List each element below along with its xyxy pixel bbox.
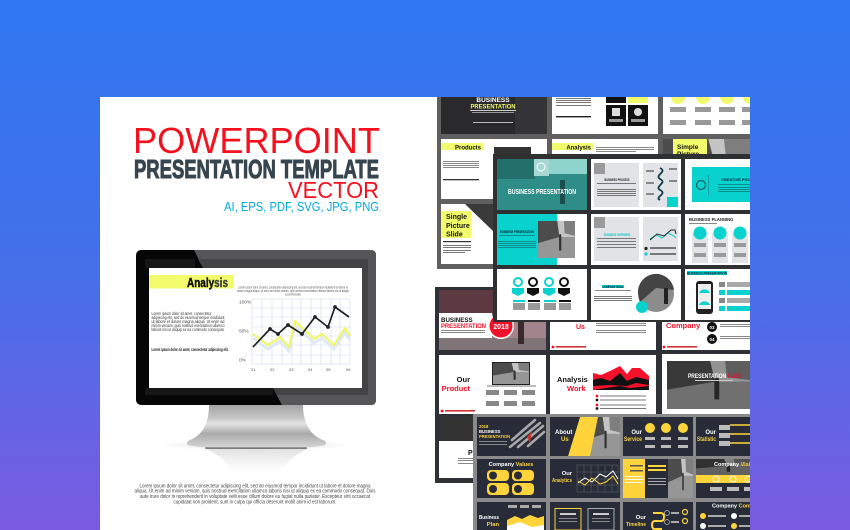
screen left paragraph: adipiscing elit, sed do eiusmod tempor incididunt — [152, 315, 225, 320]
slide: 2018 business presentation: PRESENTATION — [479, 434, 510, 439]
panel: red slide group — [435, 287, 750, 483]
line chart: 0% — [239, 358, 247, 364]
slide: Our Statistic — [696, 417, 750, 456]
slide: Company numbers: Company — [666, 321, 701, 330]
slide: Product partial: Pr — [468, 450, 476, 457]
slide: Our Statistic: Statistic — [697, 437, 717, 443]
line chart: 04 — [308, 367, 313, 372]
slide: Presentation Slide photo: PRESENTATION SLIDE — [688, 373, 742, 380]
slide: About Us: About — [555, 430, 572, 436]
slide: Simple Picture: Picture — [677, 151, 699, 158]
slide: Our Analytics: Our — [562, 471, 573, 477]
slide: Analysis: Analysis — [566, 146, 592, 152]
slide: business overview chart — [591, 214, 681, 265]
screen left paragraph: ut labore et dolore magna aliqua. Ut enim ad — [152, 319, 225, 324]
winding process line — [658, 168, 663, 200]
slide: Our Timeline: Our — [636, 515, 647, 521]
slide: Company numbers — [662, 322, 750, 350]
slide: business overview chart: BUSINESS OVERVIEW — [604, 233, 630, 237]
slide: Company Vision — [696, 459, 750, 498]
slide: Business Plan: Business — [479, 515, 499, 521]
slide: Our Analytics — [550, 459, 620, 498]
screen chart caption: dolore magna aliqua. Ut enim ad minim veniam, quis nostrud exercitation ullamco laboris nisi ut aliquip — [237, 289, 349, 293]
slide: Analysis Work: Work — [567, 384, 586, 393]
slide: Single Picture Slide — [441, 204, 493, 264]
slide: Company Values: Company Values — [489, 462, 533, 468]
title block — [133, 120, 380, 214]
slide: Single Picture Slide: Single — [446, 214, 467, 221]
screen bold line: Lorem ipsum dolor sit amet, consectetur adipiscing elit. — [152, 347, 228, 352]
line chart: 50% — [239, 328, 249, 334]
slide: Our Product — [439, 355, 546, 414]
slide: 2018 business presentation: BUSINESS — [479, 429, 501, 434]
slide: Company Vision: Company Vision — [714, 462, 758, 468]
slide: Company numbers: 03 — [709, 325, 715, 330]
slide: business presentation 2018 — [439, 290, 546, 350]
slide: Company Values — [477, 459, 546, 498]
slide: business presentation 2018: 2018 — [493, 324, 509, 331]
slide: business planning — [685, 214, 750, 265]
slide: About Us red: Us — [576, 324, 585, 331]
slide: Our Timeline — [623, 502, 693, 530]
slide: business presentation dark: PRESENTATION — [470, 104, 516, 110]
title: VECTOR: VECTOR — [288, 177, 379, 203]
slide: About Us — [550, 417, 620, 456]
line chart — [239, 299, 351, 372]
monitor stand — [145, 405, 365, 471]
line chart: 06 — [346, 367, 351, 372]
slide: About Us red — [550, 322, 656, 350]
line chart: 02 — [270, 367, 275, 372]
slide: Our Service: Service — [624, 437, 643, 443]
slide: business presentation 2018: BUSINESS — [441, 317, 473, 324]
slide: four percent icons — [497, 269, 587, 320]
slide: Business Plan: Plan — [487, 522, 499, 528]
slide: Products — [441, 139, 547, 199]
slide: Our Service — [623, 417, 693, 456]
footer paragraph: aliqua. Ut enim ad minim veniam, quis nostrud exercitation ullamco laboris nisi ut aliquip ex ea commodo consequat. Duis — [134, 488, 376, 494]
monitor bezel — [136, 250, 376, 405]
slide: company goal — [591, 269, 681, 320]
slide: Our Product: Our — [457, 375, 470, 384]
panel: yellow and navy slide group — [473, 414, 759, 530]
slide: Simple Picture — [663, 139, 750, 154]
slide: phone diagram: BUSINESS PRESENTATION — [687, 272, 727, 276]
screen chart caption: commodo — [285, 292, 301, 296]
slide: cyan business presentation — [497, 214, 587, 265]
slide: Our Timeline: Timeline — [626, 522, 647, 528]
screen left paragraph — [152, 311, 225, 332]
slide: framed boxes — [550, 502, 620, 530]
title: PRESENTATION TEMPLATE: PRESENTATION TEMPLATE — [134, 154, 379, 184]
slide: business presentation dark — [441, 97, 547, 134]
slide: Our Product: Product — [442, 384, 470, 393]
slide: Business Plan — [477, 502, 546, 530]
footer paragraph: aute irure dolor in reprehenderit in voluptate velit esse cillum dolore eu fugiat nulla pariatur. Excepteur sint occaecat — [140, 494, 371, 500]
slide: teal cover: BUSINESS PRESENTATION — [508, 189, 576, 196]
slide: business process: BUSINESS PROCESS — [604, 178, 630, 182]
slide: business planning: BUSINESS PLANNING — [689, 217, 733, 222]
line chart: 05 — [326, 367, 331, 372]
slide: Simple Picture: Simple — [677, 144, 699, 151]
area chart — [593, 366, 649, 390]
slide: Product partial — [439, 441, 473, 478]
slide: business presentation dark: BUSINESS — [476, 97, 510, 104]
slide: teal cover — [497, 159, 587, 210]
file formats: AI, EPS, PDF, SVG, JPG, PNG — [224, 200, 379, 214]
slide collage — [435, 90, 762, 530]
line chart: 03 — [289, 367, 294, 372]
screen heading: Analysis — [149, 275, 234, 290]
slide: cyan business presentation: BUSINESS PRESENTATION — [500, 230, 534, 234]
line chart: 01 — [251, 367, 256, 372]
slide: Company Contact — [696, 502, 759, 530]
slide: icon tiles — [552, 97, 658, 134]
slide: company goal: COMPANY GOAL — [602, 285, 624, 289]
slide: business process — [591, 159, 681, 210]
slide: Company numbers: 04 — [709, 337, 715, 342]
panel: teal slide group — [493, 154, 762, 322]
slide: yellow split — [623, 459, 693, 498]
slide: About Us: Us — [561, 437, 569, 443]
slide: 2018 business presentation — [477, 417, 546, 456]
slide: Analysis Work — [550, 355, 656, 414]
panel: yellow slide group — [437, 90, 757, 269]
slide: Products: Products — [455, 146, 482, 152]
slide: 2018 business presentation: 2018 — [479, 424, 489, 429]
line chart: 100% — [239, 300, 252, 306]
screen chart caption — [237, 286, 349, 296]
monitor screen — [149, 268, 362, 388]
screen chart caption: Lorem ipsum dolor sit amet, consectetur adipiscing elit, sed do eiusmod tempor incididunt ut labore et — [238, 286, 348, 290]
screen left paragraph: laboris nisi ut aliquip ex ea commodo consequat. — [152, 327, 224, 332]
slide: business presentation 2018: PRESENTATION — [441, 323, 486, 330]
slide: Our Statistic: Our — [705, 430, 717, 436]
slide: Analysis — [552, 139, 658, 154]
slide: Presentation Slide photo — [662, 354, 750, 414]
white sheet panel — [100, 97, 750, 530]
footer paragraph: cupidatat non proident, sunt in culpa qui officia deserunt mollit anim id est laborum. — [174, 500, 336, 506]
monitor illustration — [136, 250, 376, 471]
slide: Single Picture Slide: Picture — [446, 223, 470, 230]
title: POWERPOINT: POWERPOINT — [133, 120, 380, 161]
chart legend — [596, 395, 646, 410]
slide: phone diagram — [685, 269, 750, 320]
slide: Company Contact: Company Contact — [712, 504, 759, 510]
slide: Our Analytics: Analytics — [552, 478, 572, 484]
footer paragraph — [134, 484, 376, 506]
slide: Analysis Work: Analysis — [557, 375, 588, 384]
slide: yellow circles — [663, 97, 750, 134]
screen left paragraph: minim veniam, quis nostrud exercitation ullamco — [152, 323, 225, 328]
screen left paragraph: Lorem ipsum dolor sit amet, consectetur — [152, 311, 212, 316]
slide: Single Picture Slide: Slide — [446, 232, 463, 238]
footer paragraph: Lorem ipsum dolor sit amet, consectetur adipiscing elit, sed do eiusmod tempor incididunt ut labore et dolore magna — [140, 484, 371, 490]
slide: creative process — [685, 159, 750, 210]
slide: Our Service: Our — [631, 430, 643, 436]
slide: creative process: CREATIVE PROCESS — [721, 177, 762, 182]
screen heading: Analysis: Analysis — [187, 275, 228, 290]
